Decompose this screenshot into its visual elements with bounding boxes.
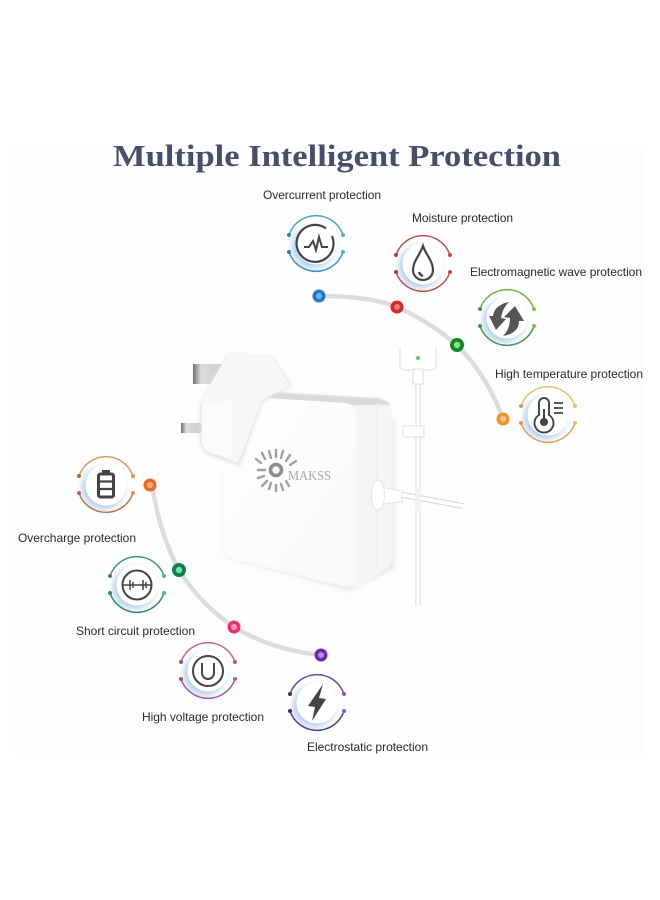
node: blue	[312, 290, 326, 302]
label: moisture: Moisture protection	[412, 211, 513, 225]
upper connector arc	[312, 290, 510, 426]
logo wordmark: MAKSS	[288, 469, 331, 484]
adapter right seam	[376, 403, 378, 566]
icon: high temperature	[519, 387, 577, 442]
background panel	[15, 145, 645, 755]
icon: electrostatic	[288, 675, 346, 730]
adapter shadow	[226, 420, 394, 590]
plug outline shadow	[200, 354, 292, 466]
label: high temperature: High temperature protection	[495, 367, 643, 381]
icon: overcharge	[77, 457, 135, 512]
power plug	[202, 354, 290, 463]
logo	[256, 450, 331, 491]
magsafe cable	[400, 348, 436, 606]
node: orange-red	[144, 478, 156, 492]
label: overcurrent: Overcurrent protection	[263, 188, 381, 202]
lower connector arc	[144, 478, 328, 662]
icon: moisture	[394, 236, 452, 291]
logo sun rays	[256, 450, 296, 491]
node: dark green	[172, 563, 186, 577]
node: green	[450, 338, 464, 352]
label: electrostatic: Electrostatic protection	[307, 740, 428, 754]
icon: high voltage	[179, 643, 237, 698]
adapter front	[224, 397, 356, 587]
adapter top edge	[252, 391, 391, 405]
label: overcharge: Overcharge protection	[18, 531, 136, 545]
node: pink	[228, 620, 240, 634]
title: Multiple Intelligent Protection	[113, 138, 561, 173]
adapter side	[350, 400, 392, 587]
cord exit	[372, 480, 463, 512]
label: short circuit: Short circuit protection	[76, 624, 195, 638]
plug fold highlight	[202, 400, 232, 458]
icon: electromagnetic wave	[478, 290, 536, 345]
icon: overcurrent	[287, 216, 345, 271]
prongs	[181, 364, 229, 433]
label: high voltage: High voltage protection	[142, 710, 264, 724]
label: electromagnetic: Electromagnetic wave protection	[470, 265, 642, 279]
node: red	[390, 300, 404, 314]
node: purple	[314, 648, 328, 662]
icon: short circuit	[108, 557, 166, 612]
labels	[18, 188, 643, 754]
node: orange	[496, 412, 510, 426]
charger illustration	[181, 348, 463, 606]
